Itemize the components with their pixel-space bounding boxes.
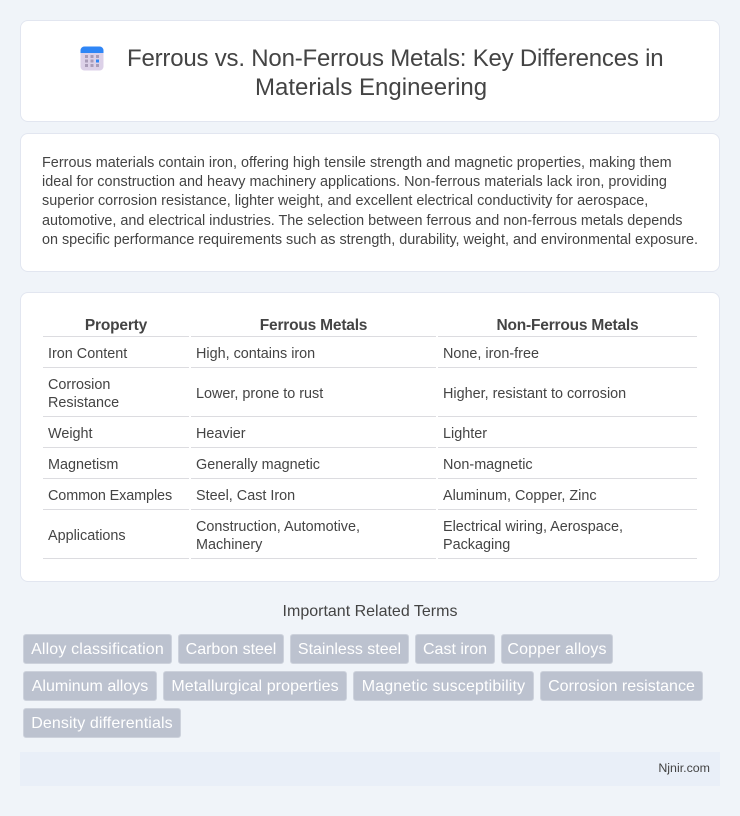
tags: related terms	[23, 634, 703, 738]
text: Resistance	[48, 395, 119, 411]
text: Carbon steel	[186, 641, 276, 658]
text: Construction, Automotive,	[196, 519, 360, 535]
intro text: superior corrosion resistance, lighter weight, and excellent electrical conductivity for aerospace,	[42, 193, 648, 209]
text: Weight	[48, 426, 93, 442]
text: Iron Content	[48, 346, 127, 362]
text: High, contains iron	[196, 346, 315, 362]
table header	[85, 317, 638, 334]
intro text: ideal for construction and heavy machinery applications. Non-ferrous materials lack iron, providing	[42, 174, 667, 190]
text: Aluminum alloys	[32, 678, 148, 695]
text: Ferrous Metals	[260, 317, 367, 334]
row: common examples	[48, 488, 597, 504]
icon: calendar	[80, 46, 104, 70]
text: Density differentials	[31, 715, 173, 732]
text: Corrosion	[48, 377, 110, 393]
text: Machinery	[196, 537, 262, 553]
text: Property	[85, 317, 147, 334]
text: Generally magnetic	[196, 457, 320, 473]
text: Common Examples	[48, 488, 172, 504]
title	[127, 45, 663, 101]
text: Higher, resistant to corrosion	[443, 386, 626, 402]
text: Cast iron	[423, 641, 487, 658]
text: Non-magnetic	[443, 457, 533, 473]
title: Ferrous vs. Non-Ferrous Metals: Key Differences in	[127, 45, 663, 72]
text: Packaging	[443, 537, 510, 553]
intro text: on specific performance requirements such as strength, durability, weight, and environmental exposure.	[42, 232, 698, 248]
text: Metallurgical properties	[171, 678, 339, 695]
text: Lighter	[443, 426, 487, 442]
text: Magnetism	[48, 457, 118, 473]
intro text: automotive, and electrical industries. The selection between ferrous and non-ferrous metals depends	[42, 213, 682, 229]
text: Heavier	[196, 426, 246, 442]
text: Lower, prone to rust	[196, 386, 323, 402]
text: Stainless steel	[298, 641, 401, 658]
text: Steel, Cast Iron	[196, 488, 295, 504]
panel: title card	[20, 20, 720, 122]
row: corrosion resistance	[48, 377, 626, 411]
intro text: Ferrous materials contain iron, offering high tensile strength and magnetic properties, making them	[42, 155, 672, 171]
title: Materials Engineering	[255, 74, 487, 101]
row: iron content	[48, 346, 539, 362]
text: Non-Ferrous Metals	[497, 317, 638, 334]
text: Alloy classification	[31, 641, 164, 658]
row: weight	[48, 426, 487, 442]
footer credit: Njnir.com	[658, 761, 710, 775]
text: Magnetic susceptibility	[362, 678, 525, 695]
footer	[20, 752, 720, 786]
panel: introduction	[20, 133, 720, 272]
text: Applications	[48, 528, 126, 544]
row: applications	[48, 519, 623, 553]
text: None, iron-free	[443, 346, 539, 362]
row: magnetism	[48, 457, 533, 473]
text: Electrical wiring, Aerospace,	[443, 519, 623, 535]
heading: important related terms: Important Related Terms	[283, 603, 457, 620]
text: Copper alloys	[507, 641, 607, 658]
text: Corrosion resistance	[548, 678, 695, 695]
intro text	[42, 155, 698, 248]
text: Aluminum, Copper, Zinc	[443, 488, 597, 504]
panel: comparison table	[20, 292, 720, 582]
